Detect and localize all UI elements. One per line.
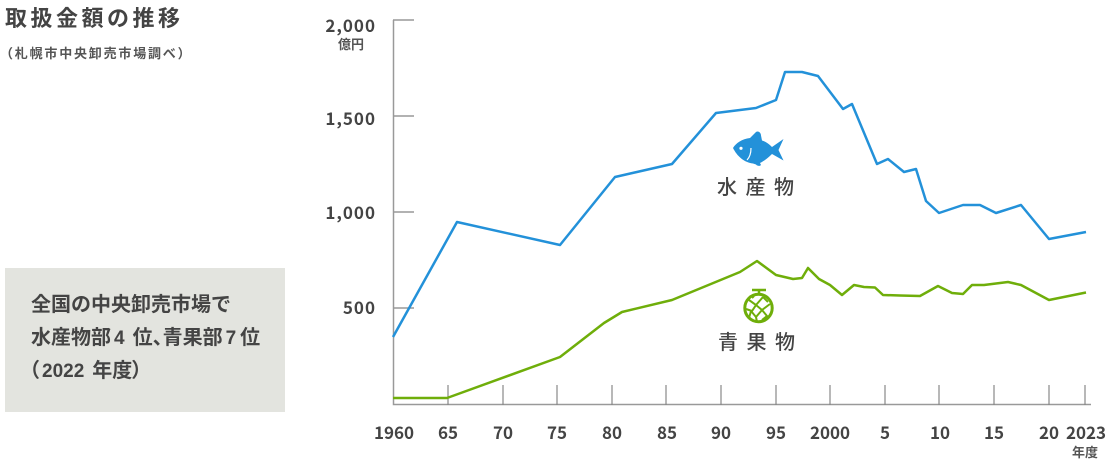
- x axis labels: 75: [547, 419, 567, 444]
- x axis labels: 95: [766, 419, 786, 444]
- y axis labels: 1,000: [325, 199, 376, 224]
- callout text: [20, 294, 260, 382]
- x axis labels: 90: [711, 419, 731, 444]
- x axis labels: 5: [880, 419, 890, 444]
- line: marine products: [393, 72, 1086, 337]
- label: produce: 青果物: [718, 326, 804, 355]
- x axis unit: 年度: [1072, 442, 1098, 461]
- x axis labels: 70: [493, 419, 513, 444]
- x axis labels: 1960: [374, 419, 414, 444]
- source note: （札幌市中央卸売市場調べ）: [0, 46, 192, 61]
- y axis unit: 億円: [338, 34, 364, 53]
- x axis labels: 80: [602, 419, 622, 444]
- x axis labels: 2000: [810, 419, 850, 444]
- y axis labels: 500: [343, 294, 376, 319]
- x axis labels: 2023: [1066, 419, 1106, 444]
- axes: [393, 20, 1091, 405]
- x axis labels: [374, 419, 1106, 444]
- callout panel: [5, 268, 285, 412]
- x axis labels: 15: [984, 419, 1004, 444]
- icon: melon: [745, 290, 772, 322]
- line: produce: [393, 261, 1086, 398]
- label: marine products: 水産物: [717, 171, 802, 200]
- title: 取扱金額の推移: [5, 6, 184, 31]
- callout text: （2022 年度）: [20, 360, 151, 382]
- y axis labels: 2,000: [325, 12, 376, 37]
- callout text: 全国の中央卸売市場で: [31, 294, 231, 316]
- y axis labels: 1,500: [325, 105, 376, 130]
- x axis labels: 20: [1039, 419, 1059, 444]
- y axis labels: [325, 12, 376, 319]
- x axis labels: 10: [930, 419, 950, 444]
- icon: fish: [733, 131, 784, 166]
- x axis labels: 85: [657, 419, 677, 444]
- x axis labels: 65: [438, 419, 458, 444]
- callout text: 水産物部4 位、青果部7位: [31, 327, 260, 349]
